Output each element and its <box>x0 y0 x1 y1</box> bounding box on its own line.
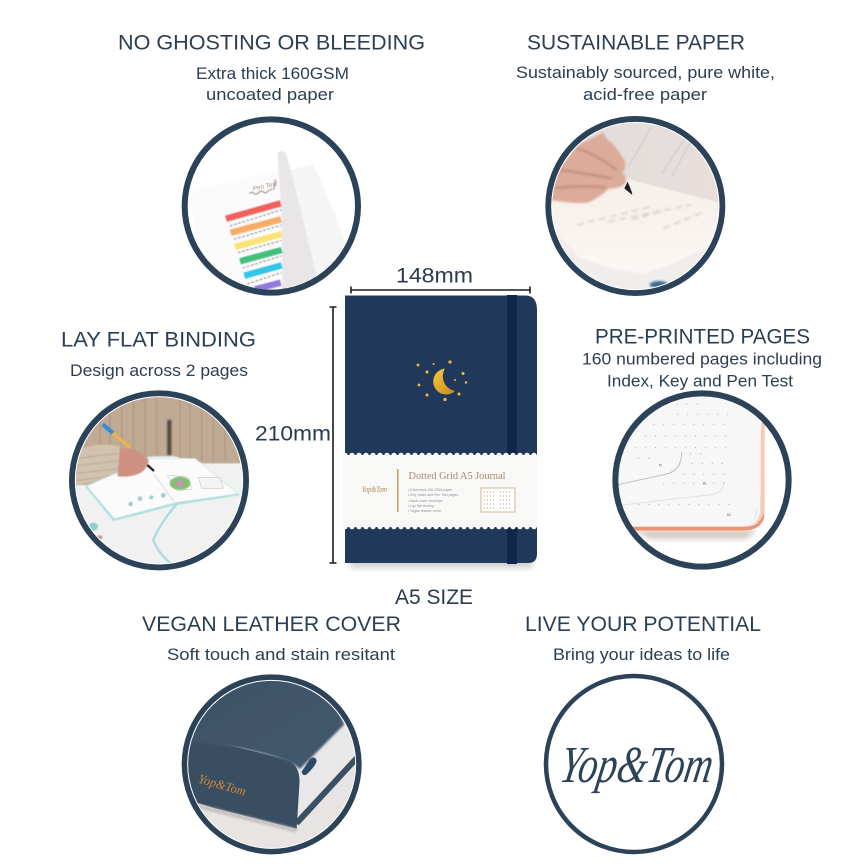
heading: live your potential: LIVE YOUR POTENTIAL <box>525 613 761 636</box>
heading: sustainable paper: SUSTAINABLE PAPER <box>527 32 745 54</box>
rainbow stripes <box>226 203 282 289</box>
hand <box>117 448 149 477</box>
photo circle: writing in open notebook <box>70 390 247 567</box>
paper sheet <box>552 179 718 272</box>
pens on table <box>89 523 98 531</box>
blue marker <box>650 281 668 288</box>
band bullet list: • Lay flat binding <box>408 504 434 508</box>
photo circle: ghost-free pen test page: Pen Test <box>252 181 278 193</box>
sweater <box>76 397 240 486</box>
text: extra thick paper: Extra thick 160GSM <box>196 64 349 83</box>
ribbon <box>153 503 177 563</box>
gold logo: Yop&Tom <box>197 772 247 799</box>
turned page <box>277 151 317 290</box>
handwriting lines <box>230 210 281 284</box>
text: numbered pages <box>582 350 822 390</box>
peach page edge <box>630 422 765 531</box>
text: soft touch: Soft touch and stain resitant <box>167 645 395 664</box>
heading: pre-printed pages: PRE-PRINTED PAGES <box>595 326 810 348</box>
back page <box>292 165 345 276</box>
photo circle: numbered page corners: 83 <box>727 513 731 517</box>
band bullet list: • Key, index and Pen Test pages <box>408 493 458 497</box>
sleeve <box>76 444 120 486</box>
notebook <box>343 295 537 568</box>
cover top <box>192 680 346 770</box>
dimension label: 210mm: 210mm <box>255 422 331 446</box>
left page <box>190 170 283 297</box>
photo circle: vegan leather spine <box>182 672 362 858</box>
pen test title <box>249 179 275 194</box>
pen nib <box>624 182 632 195</box>
text: bring your ideas: Bring your ideas to life <box>553 645 730 664</box>
text: design across pages: Design across 2 pages <box>70 361 248 380</box>
photo circle: ghost-free pen test page <box>185 119 358 297</box>
wall <box>570 123 718 202</box>
text: extra thick paper <box>196 64 349 104</box>
band divider <box>397 469 398 512</box>
notebook cover <box>345 296 537 563</box>
cover spine <box>182 737 300 829</box>
dot grid sample <box>481 488 515 512</box>
text: numbered pages: Index, Key and Pen Test <box>607 372 793 390</box>
paper belly band <box>343 455 537 527</box>
heading: no ghosting or bleeding: NO GHOSTING OR BLEEDING <box>118 32 425 54</box>
band logo: Yop&Tom <box>362 485 387 494</box>
elastic band <box>507 295 517 564</box>
elastic loop <box>302 758 317 775</box>
open notebook edge <box>85 458 240 521</box>
page curl lines <box>617 481 724 506</box>
page block <box>296 724 362 815</box>
photo circle: hand writing on paper <box>547 119 725 297</box>
moon and stars foil <box>417 360 467 401</box>
finger creases <box>555 148 617 188</box>
band bullet list: • Back cover envelope <box>408 499 443 503</box>
notebook edge <box>602 250 706 286</box>
heading: vegan leather cover: VEGAN LEATHER COVER <box>142 613 401 636</box>
text: sustainably sourced: Sustainably sourced, pure white, <box>516 63 775 82</box>
hand <box>547 133 626 203</box>
label: A5 size: A5 SIZE <box>395 586 473 609</box>
back cover edge <box>296 756 359 825</box>
page numbers: 79 <box>658 464 662 468</box>
logo circle: Yop & Tom: Yop&Tom <box>556 736 718 794</box>
logo circle: Yop & Tom <box>546 676 722 852</box>
photo circle: numbered page corners: 81 <box>703 481 707 485</box>
blurred handwriting <box>577 205 705 228</box>
pencil <box>103 424 113 433</box>
page doodle <box>167 475 192 491</box>
white pages <box>632 434 761 526</box>
dot grid <box>635 404 732 504</box>
text: sustainably sourced <box>516 63 775 104</box>
shadow under book <box>198 806 297 831</box>
page shadow <box>633 530 757 539</box>
band bullet list <box>408 488 458 513</box>
photo circle: numbered page corners <box>607 393 789 567</box>
band title: Dotted Grid A5 Journal <box>408 471 506 482</box>
heading: lay flat binding: LAY FLAT BINDING <box>61 328 256 352</box>
band bullet list: • Vegan leather cover <box>408 509 442 513</box>
dimension arrow: height <box>330 307 336 563</box>
notebook shadow <box>350 556 532 568</box>
text: sustainably sourced: acid-free paper <box>583 85 707 104</box>
dimension arrow: width <box>351 286 530 294</box>
band bullet list: • Extra thick 160 GSM paper <box>408 488 453 492</box>
text: extra thick paper: uncoated paper <box>206 85 334 104</box>
table <box>182 792 362 858</box>
dimension label: 148mm: 148mm <box>396 264 473 288</box>
open notebook pages <box>87 459 238 519</box>
elastic band lower part <box>507 530 517 564</box>
text: numbered pages: 160 numbered pages including <box>582 350 822 368</box>
